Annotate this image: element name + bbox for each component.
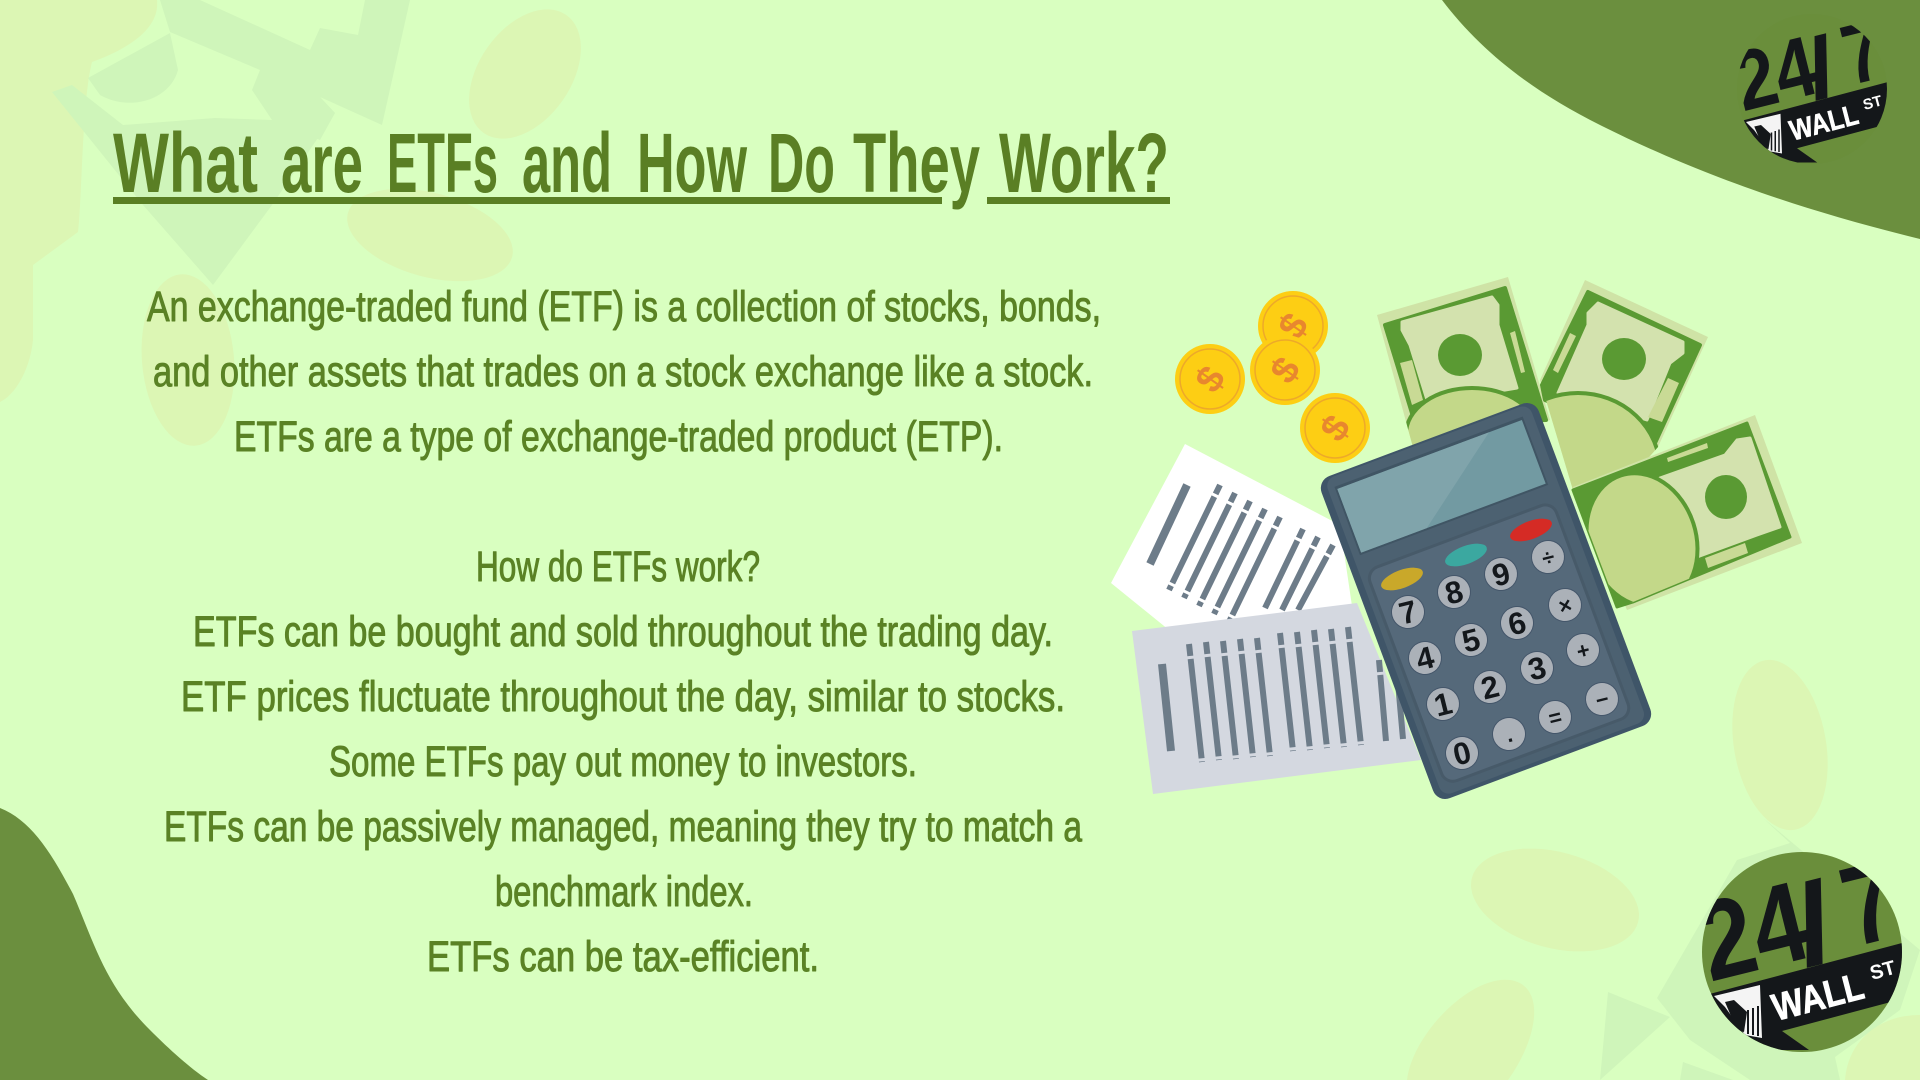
corner blob: top right — [1442, 0, 1920, 239]
keypad buttons: − — [1593, 686, 1611, 713]
icon: coin left: $ — [1188, 359, 1234, 400]
icon: calculator body — [1317, 399, 1655, 803]
keypad buttons: 7 — [1396, 593, 1421, 632]
icon: teal key — [1442, 539, 1490, 571]
text block: ETF definition: and other assets that trades on a stock exchange like a stock. — [153, 348, 1093, 396]
icon: red key — [1507, 514, 1555, 546]
title: How — [637, 116, 747, 210]
title — [113, 116, 1170, 210]
keypad buttons: + — [1574, 637, 1592, 664]
logo: top right: ST — [1861, 92, 1884, 114]
text block: how ETFs work: ETF prices fluctuate throughout the day, similar to stocks. — [181, 673, 1065, 721]
icon: grey receipt — [1132, 603, 1421, 794]
logo: bottom right: ST — [1868, 957, 1898, 985]
keypad buttons: 0 — [1450, 734, 1475, 773]
title: Do — [768, 116, 835, 210]
text block: ETF definition: An exchange-traded fund (ETF) is a collection of stocks, bonds, — [147, 283, 1101, 331]
keypad buttons — [1387, 536, 1623, 775]
text block: how ETFs work: ETFs can be tax-efficient. — [427, 933, 819, 981]
keypad buttons: 2 — [1478, 668, 1503, 707]
logo: bottom right — [1702, 852, 1902, 1052]
keypad buttons: = — [1546, 704, 1564, 731]
icon: coin back: $ — [1271, 306, 1317, 347]
keypad buttons: 9 — [1489, 555, 1514, 594]
text block: how ETFs work: ETFs can be passively managed, meaning they try to match a — [164, 803, 1082, 851]
text block: how ETFs work: benchmark index. — [495, 868, 753, 916]
icon: banknote left — [1377, 277, 1550, 445]
icon: white receipt — [1111, 444, 1352, 630]
logo: top right: WALL — [1786, 99, 1862, 148]
illustration: money and calculator — [1111, 277, 1802, 803]
keypad buttons: 1 — [1431, 685, 1456, 724]
logo: top right — [1740, 25, 1887, 162]
logo: bottom right: WALL — [1768, 966, 1868, 1030]
logo: bottom right: 7 — [1829, 836, 1908, 970]
text block: how ETFs work: How do ETFs work? — [476, 543, 760, 591]
keypad buttons: 4 — [1413, 639, 1438, 678]
title: ETFs — [387, 116, 498, 210]
text block: how ETFs work — [164, 543, 1082, 981]
icon: coin back — [1258, 291, 1328, 361]
keypad buttons: . — [1503, 722, 1515, 747]
logo: top right: 7 — [1832, 1, 1892, 103]
text block: ETF definition — [147, 283, 1101, 461]
keypad buttons: 3 — [1525, 649, 1550, 688]
keypad buttons: 8 — [1442, 573, 1467, 612]
title: Work? — [999, 116, 1169, 210]
keypad buttons: 6 — [1505, 604, 1530, 643]
title: What — [113, 116, 258, 210]
keypad buttons: 5 — [1459, 621, 1484, 660]
icon: coin middle: $ — [1263, 350, 1309, 391]
logo: bottom right: 24 — [1685, 857, 1821, 1005]
title: and — [522, 116, 612, 210]
title: are — [281, 116, 363, 210]
text block: how ETFs work: Some ETFs pay out money to investors. — [329, 738, 917, 786]
icon: coin left — [1175, 344, 1245, 414]
keypad buttons: × — [1556, 592, 1574, 619]
icon: coin middle — [1250, 335, 1320, 405]
keypad buttons: ÷ — [1539, 544, 1557, 571]
text block: how ETFs work: ETFs can be bought and sold throughout the trading day. — [193, 608, 1053, 656]
icon: coin right: $ — [1313, 408, 1359, 449]
logo: top right: 24 — [1724, 17, 1826, 129]
logo: top right: / — [1796, 18, 1846, 117]
title: They — [853, 116, 980, 210]
corner blob: bottom left — [0, 808, 208, 1080]
icon: coin right — [1300, 393, 1370, 463]
text block: ETF definition: ETFs are a type of exchange-traded product (ETP). — [234, 413, 1003, 461]
icon: yellow key — [1378, 563, 1426, 595]
logo: bottom right: / — [1780, 858, 1848, 989]
icon: banknote right — [1540, 280, 1708, 488]
icon: banknote front — [1570, 415, 1802, 621]
